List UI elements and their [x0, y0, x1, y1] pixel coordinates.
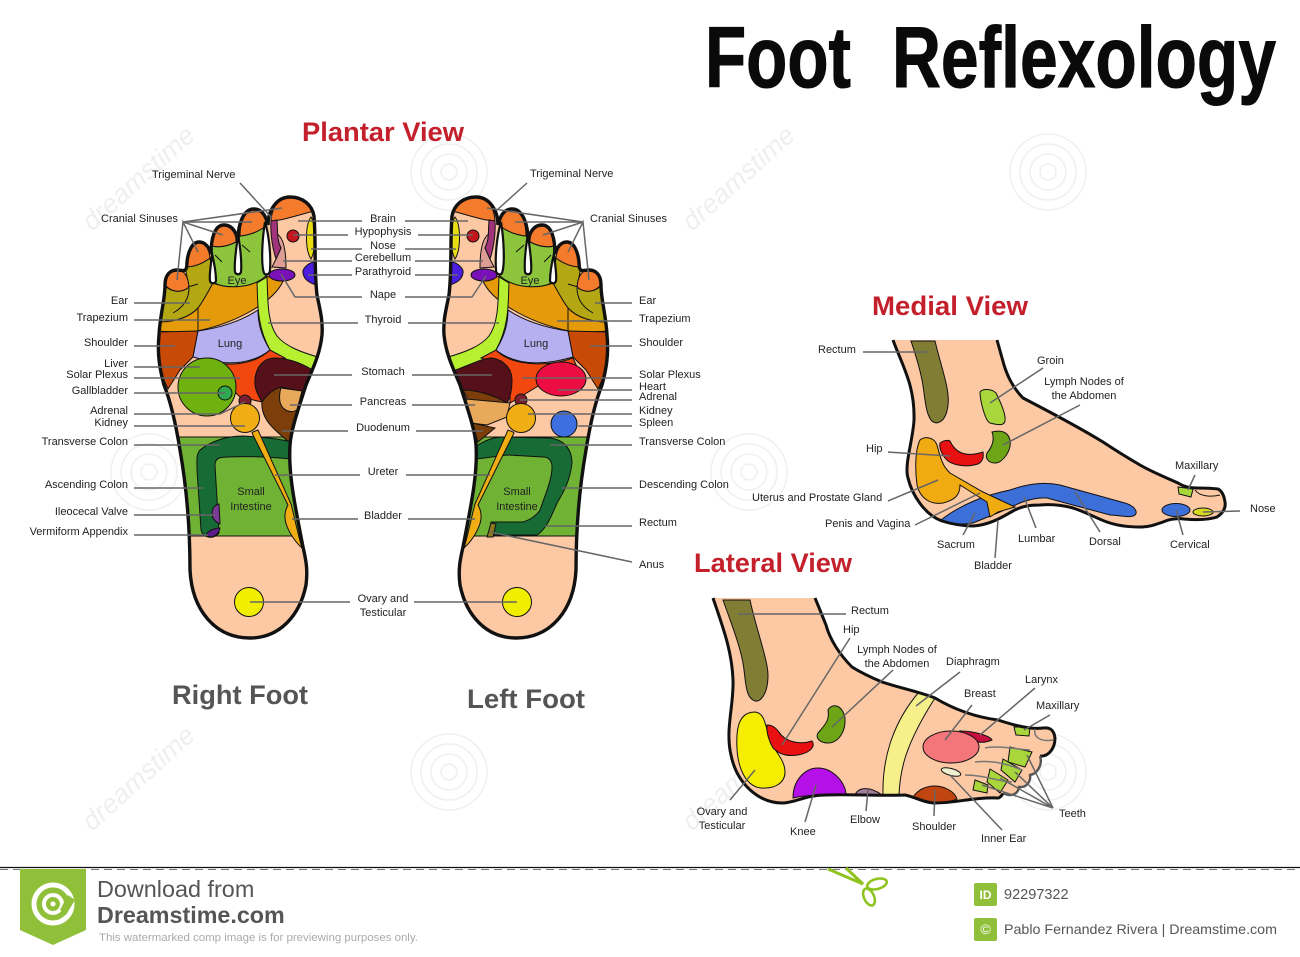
labels: top of plantar view: [101, 168, 668, 225]
panel: medial view foot: [893, 340, 1225, 527]
icon: id badge: ID: [980, 888, 992, 902]
labels: right foot left column: Adrenal: [90, 405, 128, 417]
ileocecal valve: [212, 504, 220, 524]
labels: left foot right column: Trapezium: [639, 313, 691, 325]
colon: [197, 436, 292, 537]
pancreas: [280, 388, 302, 412]
labels: inside plantar feet: Eye: [521, 275, 539, 287]
labels: right foot left column: Trapezium: [76, 312, 128, 324]
labels: right foot left column: Liver: [104, 358, 128, 370]
uterus and bladder: [916, 438, 1015, 517]
labels: lateral view: the Abdomen: [865, 658, 929, 670]
solar plexus zone: [224, 350, 287, 402]
labels: lateral view: Ovary and: [697, 806, 747, 818]
labels: medial view: Maxillary: [1175, 460, 1219, 472]
labels: left foot right column: Shoulder: [639, 337, 683, 349]
labels: right foot left column: Transverse Colon: [42, 436, 128, 448]
labels: centre column: Bladder: [364, 510, 402, 522]
labels: medial view: Cervical: [1170, 539, 1210, 551]
labels: top of plantar view: Cranial Sinuses: [101, 213, 179, 225]
kidney: [506, 404, 536, 432]
labels: centre column: Parathyroid: [355, 266, 411, 278]
labels: left foot right column: Heart: [639, 381, 666, 393]
labels: inside plantar feet: [218, 275, 548, 513]
bladder and ureter: [464, 430, 514, 548]
labels: left foot right column: Adrenal: [639, 391, 677, 403]
text: dreamstime.com: Dreamstime.com: [97, 902, 285, 928]
solar plexus zone: [481, 350, 582, 403]
labels: centre column: Nose: [370, 240, 396, 252]
text: credit: Pablo Fernandez Rivera | Dreamstime.com: [1004, 922, 1277, 938]
anus: [487, 523, 496, 537]
labels: medial view: Uterus and Prostate Gland: [752, 492, 882, 504]
inner ear: [940, 766, 962, 778]
text: download from: Download from: [97, 876, 254, 902]
leader lines: lateral view: [730, 614, 1053, 830]
labels: centre column: Cerebellum: [355, 252, 411, 264]
labels: medial view: Sacrum: [937, 539, 975, 551]
teeth and maxillary zones: [973, 727, 1032, 793]
watermark layer: dreamstime: [676, 720, 801, 836]
labels: right foot left column: Ileocecal Valve: [55, 506, 128, 518]
foot outline: [713, 598, 1003, 803]
labels: inside plantar feet: Small: [237, 486, 265, 498]
labels: centre column: Duodenum: [356, 422, 410, 434]
labels: lateral view: Teeth: [1059, 808, 1086, 820]
labels: lateral view: Rectum: [851, 605, 889, 617]
labels: lateral view: Elbow: [850, 814, 880, 826]
labels: centre column: Nape: [370, 289, 396, 301]
title: [705, 10, 1276, 106]
diaphragm: [883, 692, 935, 795]
labels: left foot right column: Anus: [639, 559, 665, 571]
labels: left foot right column: Spleen: [639, 417, 673, 429]
labels: lateral view: Inner Ear: [981, 833, 1027, 845]
labels: medial view: Groin: [1037, 355, 1064, 367]
labels: centre column: Ureter: [368, 466, 399, 478]
labels: inside plantar feet: Small: [503, 486, 531, 498]
labels: lateral view: Hip: [843, 624, 860, 636]
lower stomach: [463, 390, 507, 403]
labels: medial view: Nose: [1250, 503, 1276, 515]
leader lines: plantar view: [134, 183, 632, 602]
spleen: [551, 411, 577, 437]
labels: medial view: Bladder: [974, 560, 1012, 572]
labels: lateral view: Diaphragm: [946, 656, 1000, 668]
vermiform appendix: [206, 528, 220, 537]
labels: lateral view: Breast: [964, 688, 996, 700]
labels: medial view: Dorsal: [1089, 536, 1121, 548]
heading: left foot: Left Foot: [467, 684, 585, 714]
maxillary: [1178, 487, 1193, 497]
lymph nodes: [817, 706, 845, 743]
labels: inside plantar feet: Eye: [228, 275, 246, 287]
panel: right foot sole map: [155, 197, 322, 638]
text: image id: 92297322: [1004, 887, 1069, 903]
panel: left foot sole map: [444, 197, 611, 638]
icon: copyright badge: [974, 918, 997, 941]
labels: left foot right column: Descending Colon: [639, 479, 729, 491]
icon: dreamstime ribbon: [20, 869, 86, 945]
labels: centre column: Stomach: [361, 366, 405, 378]
icon: id badge: [974, 883, 997, 906]
labels: medial view: the Abdomen: [1052, 390, 1116, 402]
labels: right foot left column: Gallbladder: [72, 385, 128, 397]
labels: centre column: Testicular: [360, 607, 407, 619]
knee: [793, 768, 846, 798]
footer band: [0, 868, 1300, 957]
heart: [536, 362, 586, 396]
kidney: [230, 404, 260, 432]
foot fill: [893, 340, 1225, 527]
labels: medial view: Hip: [866, 443, 883, 455]
labels: lateral view: [697, 605, 1086, 845]
watermark layer: dreamstime: [676, 120, 801, 236]
rectum zone: [911, 341, 948, 423]
colon: [475, 437, 572, 535]
shoulder: [913, 786, 957, 803]
watermark layer: dreamstime: [76, 720, 201, 836]
labels: inside plantar feet: Lung: [524, 338, 548, 350]
title: Foot: [705, 10, 851, 106]
labels: medial view: Penis and Vagina: [825, 518, 911, 530]
labels: lateral view: Lymph Nodes of: [857, 644, 938, 656]
labels: left foot right column: Solar Plexus: [639, 369, 701, 381]
groin: [980, 389, 1005, 425]
labels: medial view: Lumbar: [1018, 533, 1056, 545]
panel: lateral view foot: [713, 598, 1055, 803]
icon: copyright badge: ©: [980, 921, 991, 937]
duodenum: [261, 388, 296, 441]
heading: plantar view: Plantar View: [302, 117, 465, 147]
rectum zone: [723, 600, 768, 701]
stomach: [255, 358, 314, 402]
labels: top of plantar view: Trigeminal Nerve: [152, 169, 235, 181]
labels: centre column: Hypophysis: [355, 226, 412, 238]
liver: [178, 358, 236, 416]
labels: lateral view: Larynx: [1025, 674, 1059, 686]
labels: lateral view: Knee: [790, 826, 816, 838]
labels: inside plantar feet: Intestine: [496, 501, 538, 513]
nose: [1193, 508, 1213, 516]
labels: medial view: [752, 344, 1276, 572]
labels: centre column: Thyroid: [365, 314, 401, 326]
ureter and bladder: [252, 430, 302, 548]
labels: lateral view: Shoulder: [912, 821, 956, 833]
cervical: [1162, 504, 1190, 516]
labels: inside plantar feet: Lung: [218, 338, 242, 350]
breast: [923, 731, 979, 763]
larynx: [960, 731, 992, 742]
labels: right foot left column: Solar Plexus: [66, 369, 128, 381]
labels: top of plantar view: Cranial Sinuses: [590, 213, 668, 225]
labels: right foot left column: Kidney: [94, 417, 128, 429]
spine zones: [941, 483, 1136, 524]
heading: lateral view: Lateral View: [694, 548, 853, 578]
labels: right foot left column: [30, 295, 128, 538]
ovary and testicular: [737, 712, 785, 788]
watermark layer: dreamstime: [76, 120, 201, 236]
labels: medial view: Rectum: [818, 344, 856, 356]
labels: centre column: Ovary and: [358, 593, 408, 605]
watermark layer: [76, 120, 1086, 836]
labels: left foot right column: Rectum: [639, 517, 677, 529]
labels: centre column: Brain: [370, 213, 396, 225]
foot fill: [713, 598, 1055, 803]
heading: right foot: Right Foot: [172, 680, 308, 710]
labels: centre column: Pancreas: [360, 396, 407, 408]
labels: left foot right column: Transverse Colon: [639, 436, 725, 448]
heading: medial view: Medial View: [872, 291, 1029, 321]
labels: lateral view: Testicular: [699, 820, 746, 832]
icon: scissors: [828, 868, 888, 907]
labels: lateral view: Maxillary: [1036, 700, 1080, 712]
labels: right foot left column: Shoulder: [84, 337, 128, 349]
labels: medial view: Lymph Nodes of: [1044, 376, 1125, 388]
labels: centre column: [355, 213, 412, 619]
labels: top of plantar view: Trigeminal Nerve: [530, 168, 613, 180]
labels: right foot left column: Vermiform Appendix: [30, 526, 128, 538]
labels: left foot right column: Ear: [639, 295, 656, 307]
labels: left foot right column: Kidney: [639, 405, 673, 417]
adrenal: [515, 394, 527, 406]
hip: [767, 725, 813, 756]
leader lines: medial view: [863, 352, 1240, 558]
gallbladder: [218, 386, 232, 400]
text: preview note: This watermarked comp image is for previewing purposes only.: [99, 932, 418, 944]
labels: left foot right column: [639, 295, 729, 571]
labels: right foot left column: Ear: [111, 295, 128, 307]
duodenum: [472, 423, 495, 442]
elbow: [855, 789, 882, 795]
foot outline: [893, 340, 1225, 527]
pancreas: [466, 399, 510, 425]
stomach: [453, 358, 512, 403]
adrenal: [239, 395, 251, 407]
lymph nodes: [986, 431, 1010, 463]
labels: inside plantar feet: Intestine: [230, 501, 272, 513]
labels: right foot left column: Ascending Colon: [45, 479, 128, 491]
hip: [940, 440, 983, 466]
